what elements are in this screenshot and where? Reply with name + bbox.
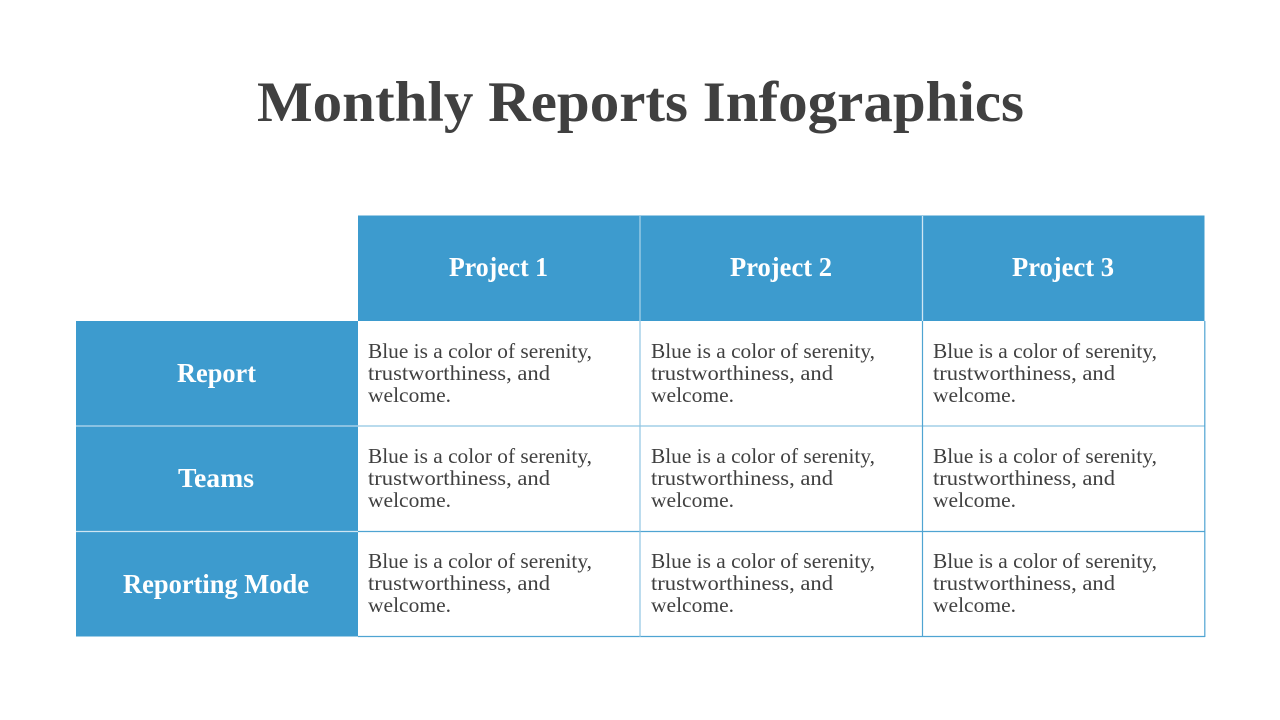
title: Monthly Reports Infographics bbox=[257, 71, 1024, 134]
cell: Reporting Mode / Project 1 bbox=[368, 549, 592, 617]
cell: Teams / Project 1: Blue is a color of serenity, bbox=[368, 444, 592, 468]
cell: Reporting Mode / Project 3 bbox=[933, 549, 1157, 617]
cell: Report / Project 2: Blue is a color of serenity, bbox=[651, 339, 875, 363]
cell: Teams / Project 1 bbox=[368, 444, 592, 512]
cell: Report / Project 3: Blue is a color of serenity, bbox=[933, 339, 1157, 363]
header: Project 1: Project 1 bbox=[449, 252, 548, 282]
cell: Reporting Mode / Project 2: Blue is a color of serenity, bbox=[651, 549, 875, 573]
cell: Reporting Mode / Project 1: welcome. bbox=[368, 593, 451, 617]
grid lines bbox=[358, 321, 1205, 637]
row header: Reporting Mode: Reporting Mode bbox=[123, 569, 309, 599]
cell: Report / Project 3: trustworthiness, and bbox=[933, 361, 1115, 385]
cell: Teams / Project 2: trustworthiness, and bbox=[651, 466, 833, 490]
cell: Report / Project 1: welcome. bbox=[368, 383, 451, 407]
header: Project 3: Project 3 bbox=[1012, 252, 1114, 282]
cell: Teams / Project 1: trustworthiness, and bbox=[368, 466, 550, 490]
cell: Reporting Mode / Project 2 bbox=[651, 549, 875, 617]
row header column bbox=[76, 321, 358, 636]
cell: Teams / Project 2: Blue is a color of serenity, bbox=[651, 444, 875, 468]
cell: Report / Project 2: welcome. bbox=[651, 383, 734, 407]
row header: Teams: Teams bbox=[178, 463, 254, 493]
cell: Report / Project 1 bbox=[368, 339, 592, 407]
cell: Reporting Mode / Project 2: trustworthiness, and bbox=[651, 571, 833, 595]
cell: Teams / Project 2: welcome. bbox=[651, 488, 734, 512]
cell: Report / Project 3 bbox=[933, 339, 1157, 407]
cell: Report / Project 3: welcome. bbox=[933, 383, 1016, 407]
cell: Report / Project 1: trustworthiness, and bbox=[368, 361, 550, 385]
cell: Reporting Mode / Project 1: Blue is a color of serenity, bbox=[368, 549, 592, 573]
cell: Reporting Mode / Project 3: welcome. bbox=[933, 593, 1016, 617]
cell: Teams / Project 3: welcome. bbox=[933, 488, 1016, 512]
cell: Reporting Mode / Project 3: trustworthiness, and bbox=[933, 571, 1115, 595]
cell: Teams / Project 1: welcome. bbox=[368, 488, 451, 512]
cell: Teams / Project 3: trustworthiness, and bbox=[933, 466, 1115, 490]
cell: Teams / Project 3: Blue is a color of serenity, bbox=[933, 444, 1157, 468]
cell: Report / Project 2: trustworthiness, and bbox=[651, 361, 833, 385]
cell: Report / Project 1: Blue is a color of serenity, bbox=[368, 339, 592, 363]
cell: Teams / Project 3 bbox=[933, 444, 1157, 512]
cell: Report / Project 2 bbox=[651, 339, 875, 407]
cell: Reporting Mode / Project 3: Blue is a color of serenity, bbox=[933, 549, 1157, 573]
row header: Report: Report bbox=[177, 358, 256, 388]
cell: Reporting Mode / Project 2: welcome. bbox=[651, 593, 734, 617]
header row bbox=[358, 216, 1204, 321]
cell: Teams / Project 2 bbox=[651, 444, 875, 512]
table bbox=[76, 216, 1205, 637]
cell: Reporting Mode / Project 1: trustworthiness, and bbox=[368, 571, 550, 595]
header: Project 2: Project 2 bbox=[730, 252, 832, 282]
